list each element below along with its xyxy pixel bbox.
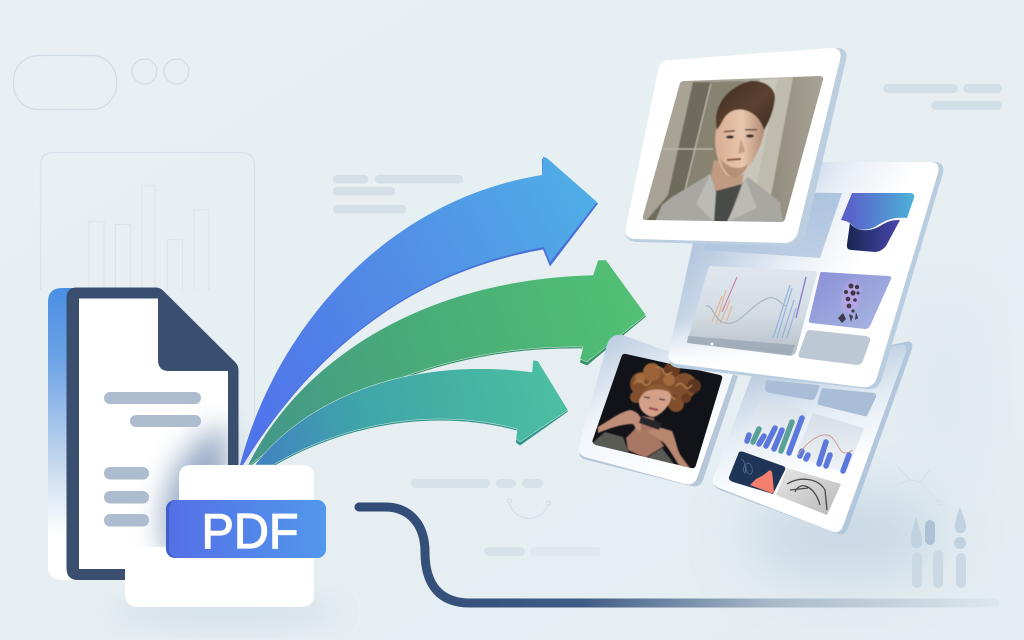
line chart panel xyxy=(687,266,817,355)
faint background pill and circles xyxy=(14,56,189,110)
window right pane xyxy=(684,81,745,195)
text line xyxy=(104,491,149,504)
mid wall xyxy=(758,77,793,194)
arrow: teal xyxy=(255,360,568,466)
hair xyxy=(630,362,701,412)
label: PDF xyxy=(202,505,298,559)
window left frame xyxy=(642,82,693,222)
window rail xyxy=(663,148,713,150)
text line xyxy=(104,514,149,526)
text line xyxy=(104,467,149,480)
mouth xyxy=(727,159,741,160)
chart strokes xyxy=(706,277,806,338)
card 2: dashboard xyxy=(668,162,943,389)
scan thumbnail xyxy=(776,468,841,515)
document outline xyxy=(66,288,238,580)
document page xyxy=(79,298,228,569)
card 4: charts xyxy=(713,342,912,534)
right wall xyxy=(771,77,810,222)
PDF document group xyxy=(48,288,238,580)
face xyxy=(715,109,765,177)
faint branching diagram xyxy=(890,467,943,505)
shirt xyxy=(714,184,742,222)
card lower fade xyxy=(668,162,939,387)
soft shadow behind cards xyxy=(110,290,975,624)
badge face xyxy=(169,500,326,558)
light pillar xyxy=(742,78,778,184)
eyes and brows xyxy=(724,129,757,139)
purple image tile xyxy=(809,272,891,329)
portrait photo xyxy=(592,354,722,468)
coral area xyxy=(750,470,774,493)
device xyxy=(639,416,662,430)
top xyxy=(592,432,675,464)
left hand and arm xyxy=(598,410,641,433)
upper blue panel xyxy=(704,192,842,258)
PDF badge group xyxy=(125,465,326,607)
neck xyxy=(711,160,745,191)
text line xyxy=(130,415,201,427)
hair xyxy=(716,81,775,130)
chart panel right xyxy=(795,413,864,474)
chest and neck xyxy=(626,416,664,458)
faint pen icons xyxy=(911,507,966,588)
chart panel left xyxy=(739,398,809,456)
eyes and lips xyxy=(644,397,665,400)
connector line xyxy=(359,507,995,603)
fringe xyxy=(644,384,671,392)
beard shadow xyxy=(720,158,748,177)
faint background bar chart xyxy=(40,152,254,420)
scan lines xyxy=(787,479,827,510)
curls xyxy=(634,367,692,400)
grey tile xyxy=(798,330,870,365)
dark thumbnail xyxy=(729,452,785,494)
page edge mask xyxy=(228,371,238,471)
right hand and arm xyxy=(648,428,690,468)
backdrop xyxy=(640,74,830,226)
lapel left xyxy=(696,174,716,222)
portrait photo xyxy=(640,74,830,226)
nose shadow xyxy=(738,138,745,154)
window panes xyxy=(645,82,714,222)
card 1: portrait xyxy=(625,48,846,246)
jacket xyxy=(655,174,783,222)
wave logo xyxy=(841,193,914,252)
faint text lines top right xyxy=(883,84,1002,110)
chart footer band xyxy=(687,336,795,356)
face xyxy=(639,387,671,417)
lapel right xyxy=(727,178,757,222)
faint text lines bottom centre xyxy=(411,479,601,556)
trend line xyxy=(798,435,853,455)
faint text lines near arrows xyxy=(333,175,463,214)
arrow: green xyxy=(248,260,646,466)
window mullion xyxy=(685,83,711,190)
badge xyxy=(166,500,326,558)
scribble xyxy=(741,460,752,474)
chart footer dot xyxy=(710,342,714,346)
bars xyxy=(747,418,849,471)
specimen in purple tile xyxy=(838,279,863,323)
text line xyxy=(104,392,201,404)
white card xyxy=(125,465,314,607)
card 3: portrait xyxy=(578,335,738,486)
faint curve node xyxy=(508,499,550,518)
arrow: blue xyxy=(240,157,598,466)
blue offset strip xyxy=(48,288,90,580)
inner shadow xyxy=(162,425,228,560)
header tabs xyxy=(765,380,876,416)
